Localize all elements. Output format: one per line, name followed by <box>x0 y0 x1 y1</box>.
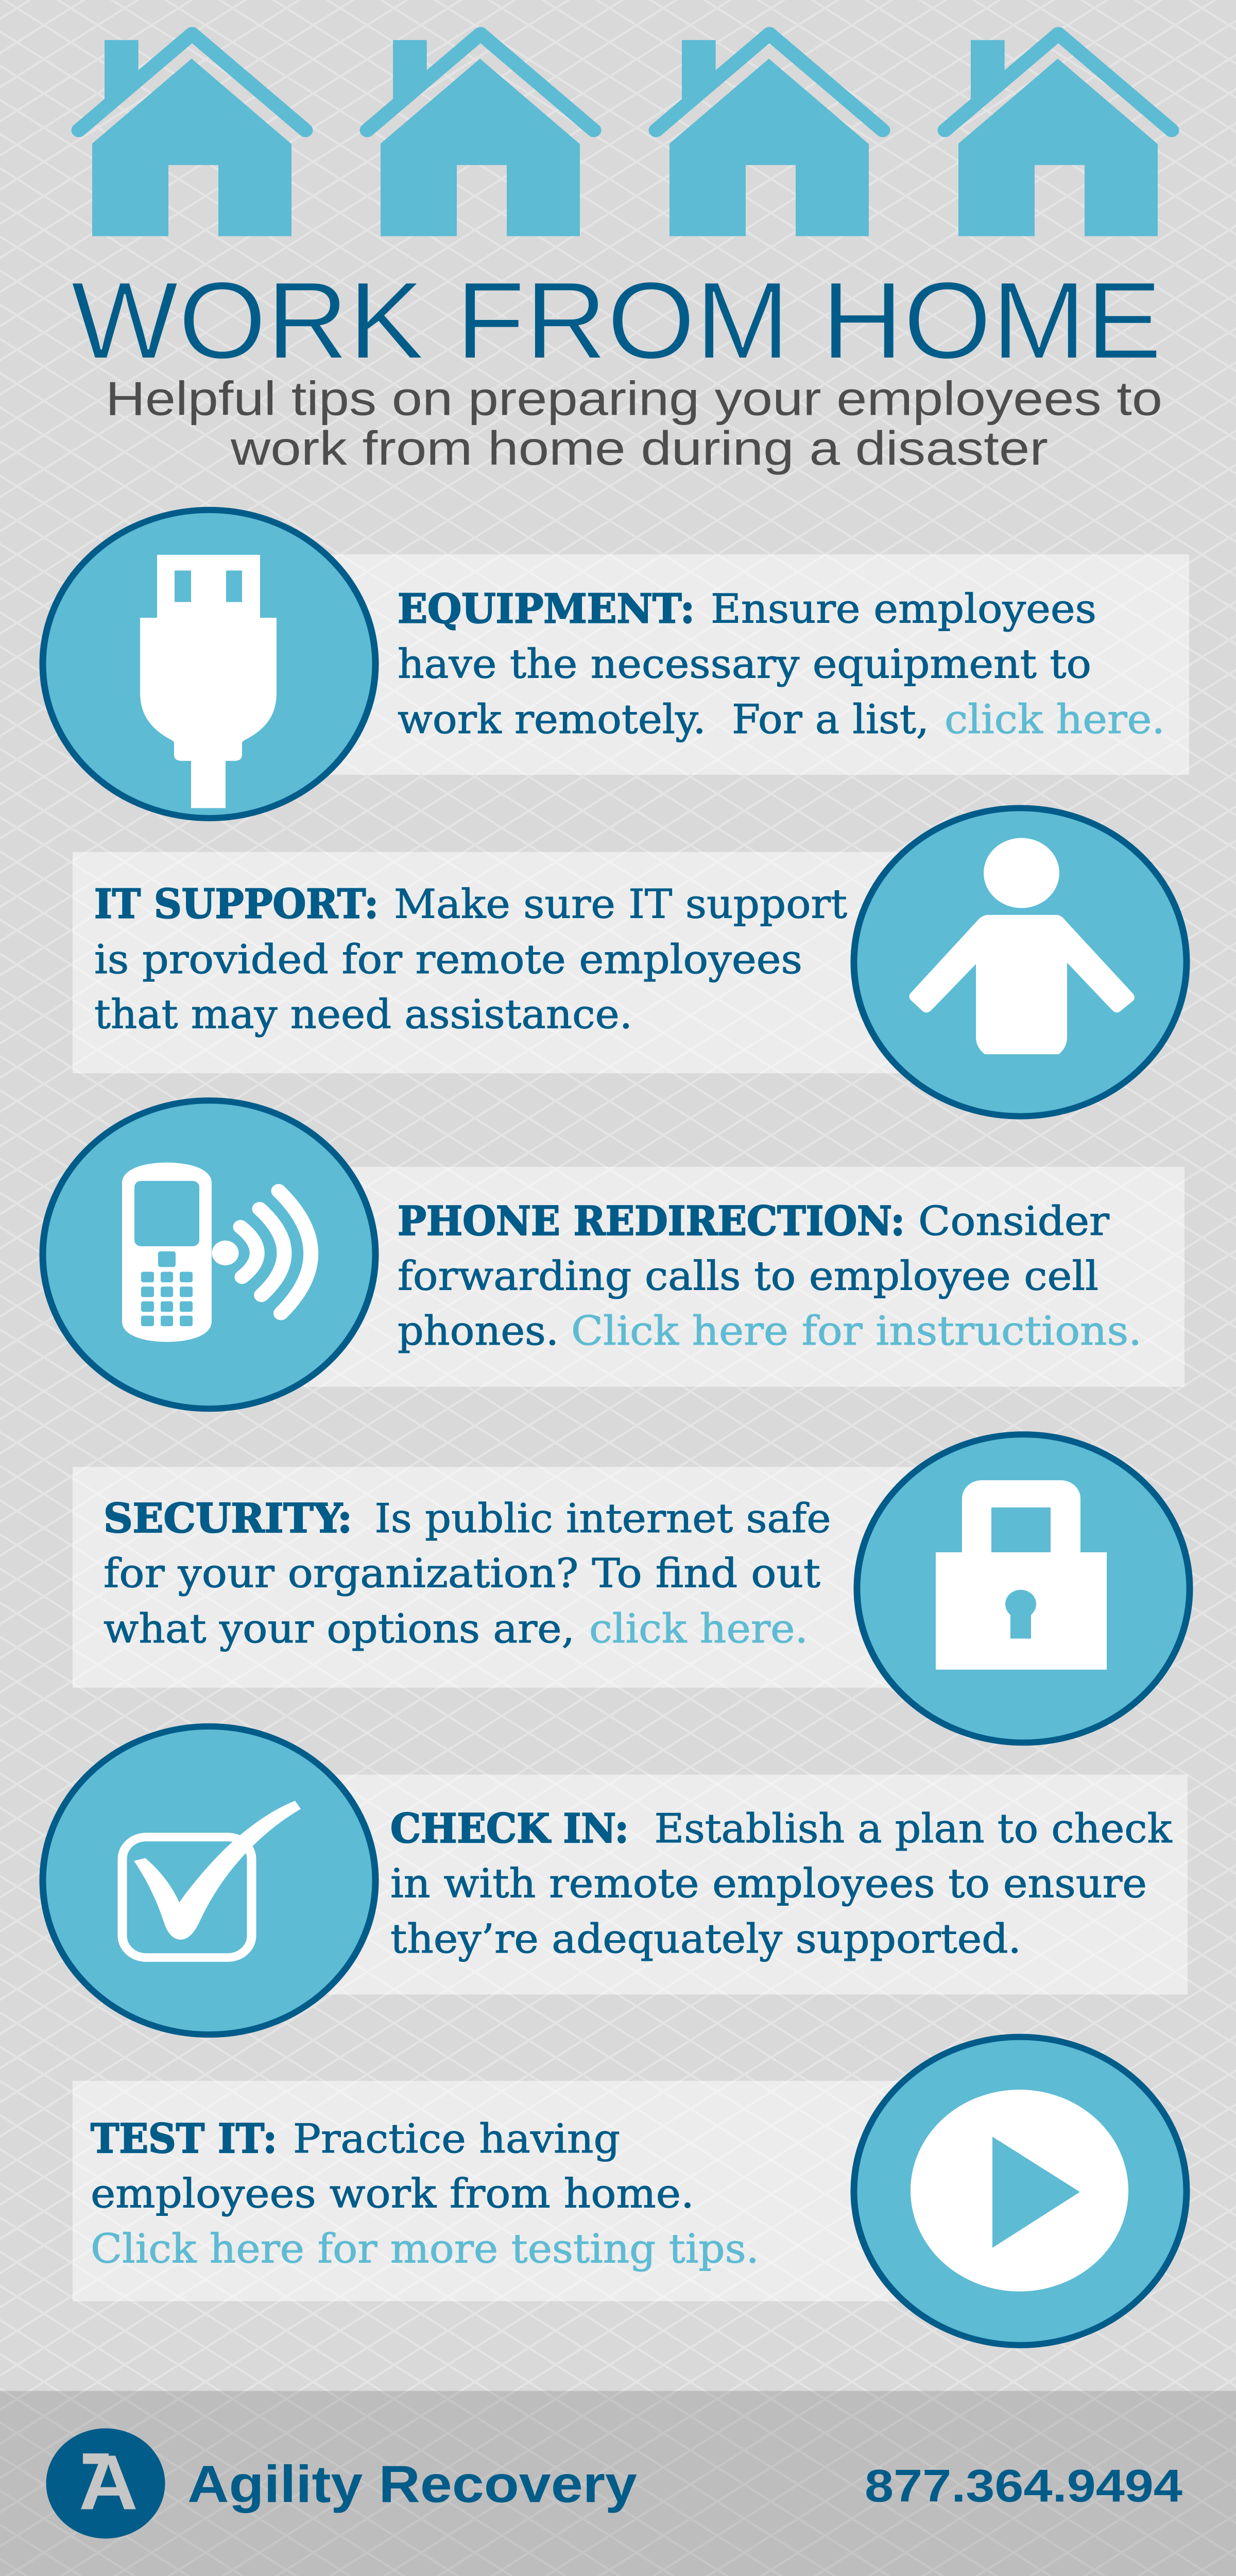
icon: house 3 <box>656 34 883 236</box>
panel background <box>258 554 1189 775</box>
panel background <box>258 1774 1188 1994</box>
text block: phone redirection: phones. <box>398 1308 559 1354</box>
text block: it support: is provided for remote employees <box>94 937 802 983</box>
text block: security: what your options are, <box>104 1606 575 1652</box>
text block: check in <box>390 1805 1172 1962</box>
panel: phone redirection <box>43 1100 1184 1409</box>
text block: test it: employees work from home. <box>91 2171 694 2217</box>
logo: agility recovery mark <box>46 2428 165 2538</box>
text block: phone redirection: Click here for instructions. <box>571 1308 1142 1354</box>
text block: test it: TEST IT: <box>91 2115 277 2162</box>
phone number: 877.364.9494 <box>865 2460 1182 2512</box>
subtitle: work from home during a disaster <box>230 422 1048 475</box>
icon: play button <box>911 2090 1128 2292</box>
text block: security <box>104 1495 831 1652</box>
text block: it support: IT SUPPORT: <box>94 880 379 928</box>
panel background <box>258 1167 1184 1387</box>
text block: it support: Make sure IT support <box>394 881 847 928</box>
icon: checkbox <box>123 1801 301 1958</box>
text block: security: click here. <box>589 1606 808 1652</box>
text block: equipment <box>398 585 1165 743</box>
text block: equipment: have the necessary equipment to <box>398 641 1091 688</box>
text block: check in: they’re adequately supported. <box>390 1916 1021 1962</box>
icon: padlock <box>936 1480 1107 1670</box>
text block: it support <box>94 880 847 1038</box>
subtitle <box>106 372 1162 475</box>
panel: test it <box>73 2037 1187 2345</box>
icon circle <box>854 2037 1187 2345</box>
icon: house 2 <box>367 34 594 236</box>
logo: agility recovery mark: A <box>79 2439 138 2526</box>
panel: security <box>73 1434 1190 1742</box>
text block: test it: Click here for more testing tips. <box>91 2226 759 2273</box>
houses row <box>79 34 1172 236</box>
text block: security: for your organization? To find out <box>104 1550 820 1597</box>
icon circle <box>857 1434 1190 1742</box>
text block: equipment: click here. <box>945 697 1165 743</box>
title: WORK FROM HOME <box>71 259 1162 382</box>
text block: phone redirection: Consider <box>918 1198 1109 1245</box>
icon: usb plug <box>140 555 277 808</box>
text block: equipment: EQUIPMENT: <box>398 585 695 633</box>
panel: it support <box>73 808 1187 1116</box>
panel: check in <box>43 1726 1188 2035</box>
text block: check in: in with remote employees to ensure <box>390 1860 1147 1907</box>
footer band <box>0 2391 1236 2576</box>
text block: equipment: work remotely. For a list, <box>398 697 929 743</box>
icon: person <box>909 838 1135 1054</box>
text block: security: Is public internet safe <box>375 1496 831 1542</box>
footer background <box>0 2391 1236 2576</box>
text block: test it <box>91 2115 759 2273</box>
text block: phone redirection: PHONE REDIRECTION: <box>398 1198 905 1245</box>
logo wordmark: Agility Recovery <box>187 2455 637 2514</box>
text block: it support: that may need assistance. <box>94 991 632 1038</box>
icon: house 4 <box>945 34 1172 236</box>
icon circle <box>43 1100 375 1409</box>
icon circle <box>854 808 1187 1116</box>
subtitle: Helpful tips on preparing your employees to <box>106 372 1162 426</box>
panel: equipment <box>43 510 1189 818</box>
panel background <box>73 852 948 1073</box>
text block: phone redirection <box>398 1198 1142 1354</box>
text block: security: SECURITY: <box>104 1495 352 1542</box>
text block: test it: Practice having <box>293 2116 620 2162</box>
text block: check in: Establish a plan to check <box>654 1806 1172 1852</box>
icon: cell phone with signal <box>122 1162 311 1342</box>
panel background <box>73 2081 948 2301</box>
icon circle <box>43 510 375 818</box>
icon: house 1 <box>79 34 305 236</box>
text block: check in: CHECK IN: <box>390 1805 629 1852</box>
text block: equipment: Ensure employees <box>711 586 1096 633</box>
icon circle <box>43 1726 375 2035</box>
panel background <box>73 1467 948 1688</box>
text block: phone redirection: forwarding calls to employee cell <box>398 1253 1098 1300</box>
